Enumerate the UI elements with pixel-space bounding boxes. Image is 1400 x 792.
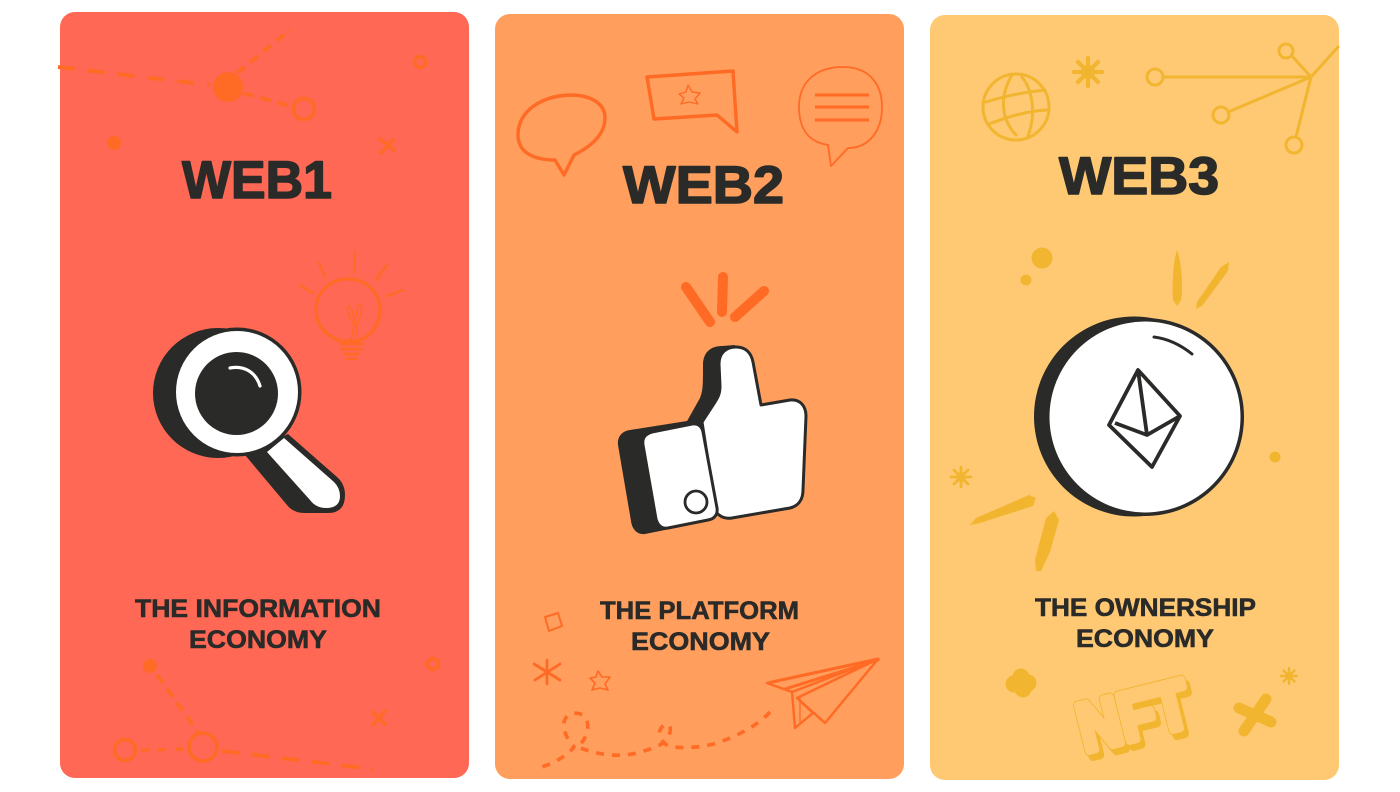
panel: Web2 [495,14,904,779]
icon: magnifying glass [153,328,345,513]
subtitle: The information economy: THE INFORMATION [135,595,381,623]
icon: NFT lettering: NFT [1070,666,1197,767]
title: WEB3: WEB3 [1059,147,1219,206]
burst rays [970,250,1229,571]
panel: Web3 [930,15,1339,780]
subtitle: The ownership economy [1035,594,1256,653]
thumb shadow [686,345,735,430]
hand [702,347,806,518]
doodles: dots [1020,248,1280,462]
icon: light bulb [300,253,403,359]
icon: asterisk [1074,58,1102,86]
burst rays above thumb [686,277,764,322]
icon: NFT lettering: NFT [1070,666,1197,767]
constellation top [58,29,314,120]
subtitle: The ownership economy: THE OWNERSHIP [1035,594,1256,622]
subtitle: The platform economy: ECONOMY [631,628,770,656]
panel background: Web2 [495,14,904,779]
dashed flight path [535,712,770,769]
cuff shadow [618,421,700,534]
subtitle: The platform economy: THE PLATFORM [600,597,799,625]
icon: paper plane [767,659,878,728]
network diagram [1147,44,1338,153]
icon: NFT lettering: NFT [1074,671,1201,772]
cuff [643,424,717,528]
subtitle: The information economy [135,595,381,654]
subtitle: The information economy: ECONOMY [189,626,327,654]
icon: round speech bubble with lines [799,67,882,166]
panel: Web1 [58,12,469,778]
icon: globe [983,74,1049,140]
decorative ring and dot [107,56,426,153]
icon: cross [1239,699,1271,731]
subtitle: The platform economy [600,597,799,656]
subtitle: The ownership economy: ECONOMY [1076,625,1214,653]
icon: thumbs up [618,345,806,534]
lens [153,328,283,458]
panel background: Web3 [930,15,1339,780]
doodles: asterisks [951,467,1297,684]
Ethereum logo [1109,370,1180,467]
icon: oval speech bubble [518,95,605,175]
icon: rectangular speech bubble with star [647,71,737,132]
constellation bottom [114,658,438,769]
panel background: Web1 [60,12,469,778]
doodles: square, asterisk, star [534,613,610,690]
title: WEB2: WEB2 [623,156,784,215]
title: WEB1: WEB1 [182,151,332,210]
icon: flower blob [1006,668,1036,698]
icon: Ethereum coin [1034,316,1244,516]
handle [245,434,345,513]
